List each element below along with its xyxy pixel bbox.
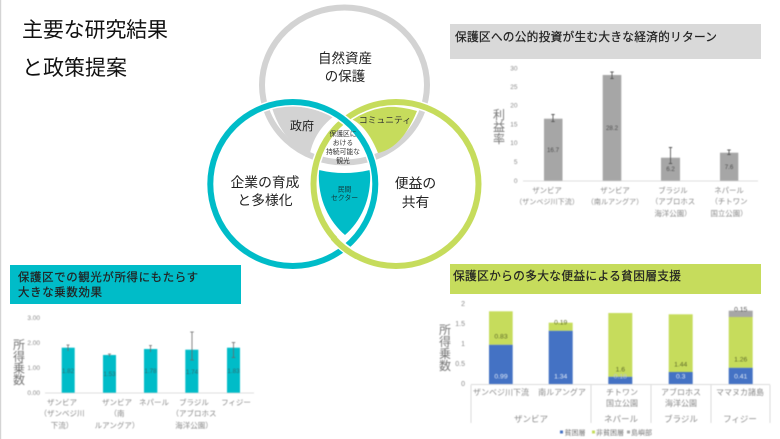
title	[22, 19, 168, 80]
label: sustainable tourism in protected areas: おける	[333, 139, 353, 147]
label: sustainable tourism in protected areas: 持続可能な	[326, 147, 360, 156]
bar chart: rate of return	[493, 66, 758, 218]
axis label: 益	[493, 120, 505, 134]
heading: 保護区からの多大な便益による貧困層支援	[453, 269, 681, 283]
stacked bar chart: income multiplier by group: ネパール	[604, 414, 638, 424]
legend: 非貧困層	[596, 428, 624, 437]
bar chart: income multiplier: （南	[110, 408, 125, 418]
bar chart: income multiplier: 1.82	[62, 368, 75, 375]
stacked bar chart: income multiplier by group: 1	[461, 341, 465, 348]
stacked bar chart: income multiplier by group: 0.99	[494, 374, 508, 380]
panel: public investment returns	[450, 24, 761, 218]
axis label: 乗	[439, 347, 451, 361]
title: と政策提案	[22, 57, 127, 80]
stacked bar chart: income multiplier by group: フィジー	[723, 414, 757, 424]
bar chart: rate of return: （アブロホス	[651, 197, 695, 206]
bar chart: rate of return: 7.6	[725, 164, 734, 171]
bar chart: rate of return: 海洋公園）	[655, 209, 691, 218]
panel: benefits supporting the poor	[439, 264, 770, 437]
axis label: 数	[439, 358, 451, 373]
bar chart: income multiplier: 1.00	[27, 365, 40, 372]
label: community: コミュニティ	[359, 115, 411, 125]
bar chart: rate of return: 国立公園）	[711, 209, 747, 218]
heading: 保護区での観光が所得にもたらす	[18, 270, 198, 284]
stacked bar chart: income multiplier by group: ザンベジ川下流	[473, 387, 529, 397]
axis label	[439, 323, 451, 373]
stacked bar chart: income multiplier by group: 国立公園	[606, 398, 638, 408]
bar chart: rate of return: 16.7	[547, 147, 560, 154]
bar chart: income multiplier	[13, 315, 254, 430]
stacked bar chart: income multiplier by group: 1.5	[455, 321, 465, 328]
stacked bar chart: income multiplier by group: 0.19	[554, 320, 568, 326]
label: private sector: セクター	[331, 193, 358, 202]
heading	[450, 24, 761, 59]
bar chart: income multiplier: 1.78	[144, 368, 157, 375]
stacked bar chart: income multiplier by group: 0.18	[614, 374, 627, 380]
label: benefit sharing	[395, 176, 436, 210]
stacked bar chart: income multiplier by group: 0.15	[734, 306, 748, 314]
bar chart: rate of return: 0	[514, 178, 518, 185]
label: natural capital protection	[318, 50, 372, 84]
stacked bar chart: income multiplier by group: 南ルアングア	[538, 387, 586, 397]
heading	[10, 265, 241, 304]
bar chart: rate of return: （チトワン	[711, 197, 747, 206]
bar chart: income multiplier: 1.74	[186, 369, 199, 376]
label: business development: 企業の育成	[231, 175, 300, 190]
stacked bar chart: income multiplier by group: 1.34	[554, 374, 568, 380]
bar chart: rate of return: （ザンベジ川下流）	[515, 197, 579, 206]
wedge: government	[272, 106, 333, 153]
label: natural capital protection: の保護	[325, 69, 366, 84]
stacked bar chart: income multiplier by group: 0.83	[494, 334, 508, 340]
bar chart: income multiplier: 3.00	[27, 315, 40, 322]
panel: tourism income multiplier	[10, 265, 254, 430]
axis label: 得	[13, 349, 25, 364]
title: 主要な研究結果	[22, 19, 168, 42]
bar chart: rate of return: 20	[510, 102, 518, 110]
label: business development	[231, 175, 300, 208]
axis label: 利	[493, 108, 505, 122]
stacked bar chart: income multiplier by group: ブラジル	[664, 414, 698, 424]
stacked bar chart: income multiplier by group: 0	[461, 381, 465, 388]
stacked bar chart: income multiplier by group: アブロホス	[661, 387, 701, 397]
stacked bar chart: income multiplier by group: ママヌカ諸島	[716, 387, 764, 397]
bar chart: rate of return: 10	[510, 140, 518, 147]
heading: 保護区への公的投資が生む大きな経済的リターン	[455, 30, 717, 44]
bar chart: rate of return: ネパール	[714, 186, 744, 195]
axis label: 所	[439, 323, 451, 337]
wedge: private sector	[319, 170, 370, 235]
bar chart: income multiplier: ブラジル	[179, 397, 209, 407]
bar chart: income multiplier: 1.53	[103, 371, 116, 378]
legend: 島嶼部	[631, 428, 652, 437]
label: government: 政府	[290, 119, 314, 133]
bar chart: income multiplier: 2.00	[27, 340, 40, 347]
stacked bar chart: income multiplier by group: 2	[461, 301, 465, 308]
label: natural capital protection: 自然資産	[318, 50, 372, 66]
axis label: 得	[439, 334, 451, 349]
bar chart: income multiplier: ザンビア	[47, 398, 77, 407]
axis label: 率	[493, 132, 505, 146]
bar chart: income multiplier: 海洋公園）	[175, 420, 213, 430]
stacked bar chart: income multiplier by group: 海洋公園	[665, 398, 697, 408]
stacked bar chart: income multiplier by group	[439, 301, 770, 437]
bar chart: rate of return: 5	[514, 159, 518, 166]
stacked bar chart: income multiplier by group: 1.44	[674, 362, 688, 368]
heading: 大きな乗数効果	[18, 285, 102, 299]
axis label: 乗	[13, 362, 25, 376]
label: sustainable tourism in protected areas: 保護区に	[329, 129, 357, 138]
bar chart: rate of return: 30	[510, 66, 518, 72]
circle: benefit sharing	[314, 102, 478, 266]
stacked bar chart: income multiplier by group: 1.6	[616, 366, 625, 374]
circle: natural capital protection	[262, 8, 427, 162]
bar chart: income multiplier: ネパール	[139, 398, 169, 407]
label: benefit sharing: 共有	[402, 195, 429, 210]
venn diagram	[210, 8, 478, 266]
bar chart: rate of return: 25	[510, 84, 518, 91]
stacked bar chart: income multiplier by group: チトワン	[606, 388, 638, 397]
bar chart: rate of return: ザンビア	[600, 186, 630, 195]
heading	[450, 264, 761, 294]
bar chart: income multiplier: （ザンベジ川	[40, 409, 84, 418]
bar chart: income multiplier: 0.00	[27, 390, 40, 397]
label: sustainable tourism in protected areas: 観光	[336, 156, 350, 165]
legend: 貧困層	[564, 428, 586, 437]
stacked bar chart: income multiplier by group: ザンビア	[514, 414, 548, 424]
label: private sector	[331, 186, 358, 202]
label: business development: と多様化	[237, 193, 293, 208]
legend	[560, 428, 652, 437]
bar chart: income multiplier: フィジー	[221, 398, 251, 407]
axis label	[13, 338, 25, 387]
wedge: community	[345, 107, 417, 153]
bar chart: income multiplier: ルアングア）	[95, 420, 139, 430]
bar chart: income multiplier: （アブロホス	[172, 408, 216, 418]
axis label: 所	[13, 338, 25, 352]
bar chart: rate of return: 6.2	[666, 166, 675, 173]
label: benefit sharing: 便益の	[395, 176, 436, 191]
bar chart: rate of return: ザンビア	[532, 186, 562, 195]
axis label	[493, 108, 505, 146]
bar chart: rate of return: ブラジル	[658, 186, 688, 195]
stacked bar chart: income multiplier by group: 0.3	[676, 374, 686, 380]
bar chart: income multiplier: 1.83	[227, 368, 240, 375]
label: private sector: 民間	[338, 186, 351, 194]
circle: business development	[210, 102, 375, 266]
stacked bar chart: income multiplier by group: 0.5	[455, 361, 465, 368]
bar chart: rate of return: 15	[510, 122, 518, 128]
axis label: 数	[13, 372, 25, 387]
stacked bar chart: income multiplier by group: 0.41	[734, 374, 748, 380]
bar chart: income multiplier: 下流）	[51, 420, 73, 430]
bar chart: rate of return: 28.2	[606, 125, 619, 132]
bar chart: rate of return: （南ルアングア）	[587, 197, 643, 206]
bar chart: income multiplier: ザンビア	[102, 398, 132, 407]
stacked bar chart: income multiplier by group: 1.26	[734, 356, 748, 364]
label: sustainable tourism in protected areas	[326, 129, 360, 165]
